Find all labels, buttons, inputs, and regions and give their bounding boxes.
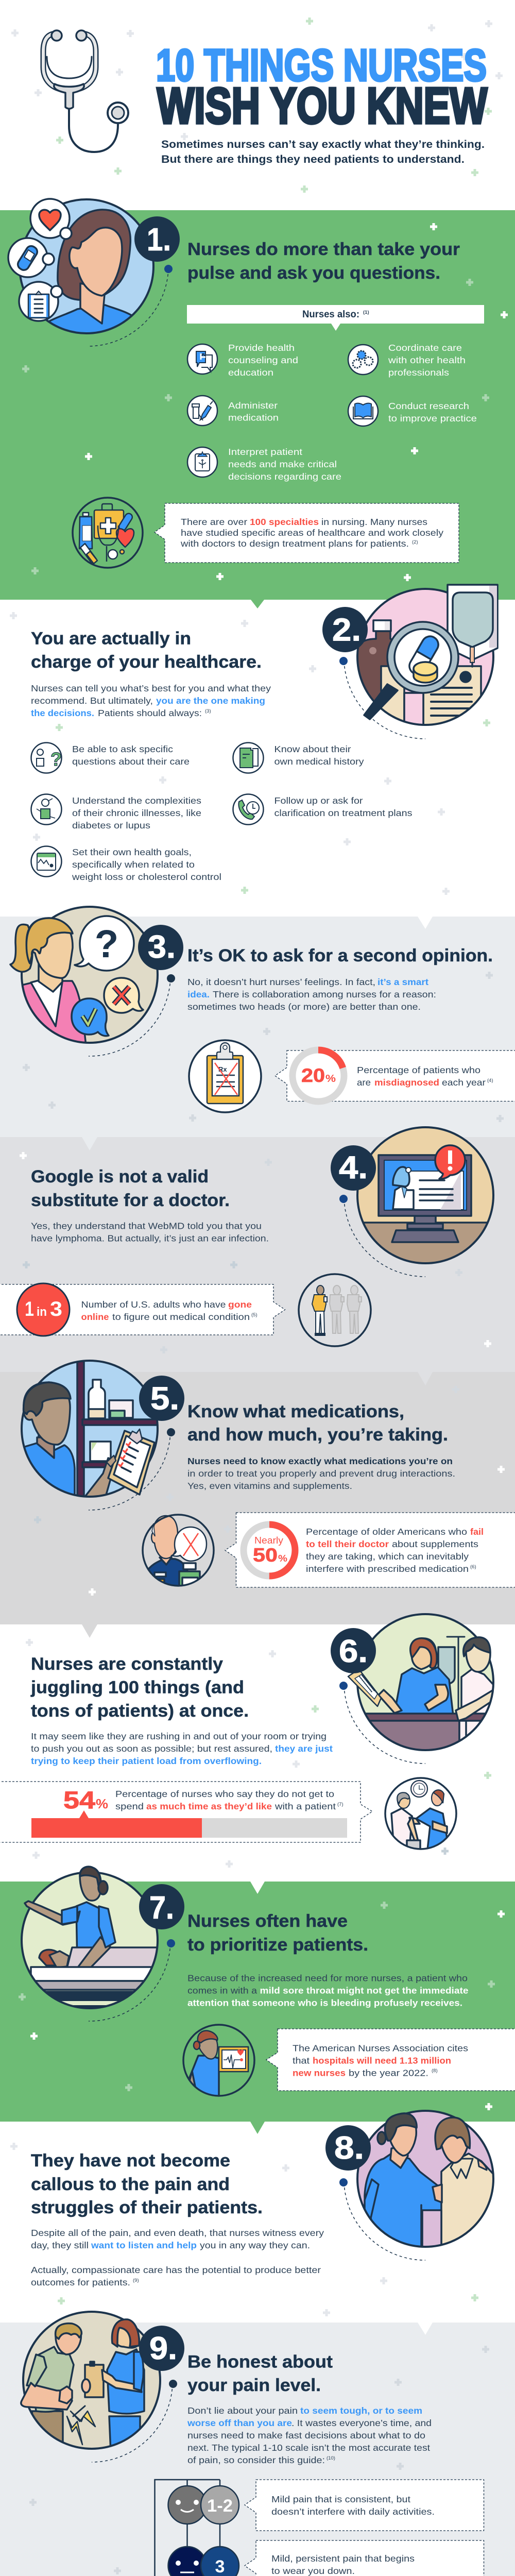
list item: health goals <box>31 846 221 882</box>
stat box: 20% misdiagnosed: Percentage of patients who <box>357 1065 480 1075</box>
number badge 5: 5. <box>150 1381 179 1417</box>
heading: Nurses often have <box>187 1911 348 1931</box>
stat box: 1 in 3: (5) <box>251 1312 258 1318</box>
illustration: patient in pain with nurse <box>21 2312 160 2452</box>
illustration: doctor on monitor <box>355 1127 494 1269</box>
stat box: 1 in 3: online <box>81 1312 109 1322</box>
dashed connector <box>344 2182 425 2260</box>
text block: Nurses can tell you what’s best for you and what they <box>31 683 271 693</box>
text block: you are the one making <box>156 696 265 706</box>
text block: it’s a smart <box>377 977 428 987</box>
number badge 2 <box>322 607 368 652</box>
list item: chronic illness: of their chronic illnesses, like <box>72 808 201 818</box>
level 1-2: 1-2 <box>207 2496 233 2516</box>
heading: callous to the pain and <box>31 2175 230 2194</box>
heading: and how much, you’re taking. <box>187 1425 448 1445</box>
text block: Don’t lie about your pain <box>187 2405 298 2416</box>
stat box: 1.13 million nurses: (8) <box>432 2068 438 2074</box>
stat box: 54% bar chart: % <box>96 1796 108 1811</box>
stat box: 20% misdiagnosed: are <box>357 1077 371 1088</box>
heading <box>187 2352 333 2395</box>
number badge 3: 3. <box>148 929 176 965</box>
stat box: 54% bar chart: spend <box>115 1801 144 1811</box>
heading: Nurses are constantly <box>31 1654 223 1674</box>
stat box: 20% misdiagnosed: misdiagnosed <box>374 1077 439 1088</box>
text block <box>187 977 436 1012</box>
heading: to prioritize patients. <box>187 1935 368 1955</box>
callout: 100 specialties: with doctors to design treatment plans for patients. <box>180 538 409 549</box>
stat box: nearly 50%: about supplements <box>392 1539 478 1549</box>
text block: want to listen and help <box>91 2240 197 2250</box>
subtitle: But there are things they need patients to understand. <box>161 154 465 165</box>
list item: health goals: Set their own health goals, <box>72 847 192 857</box>
list item: counseling <box>187 343 298 378</box>
heading: They have not become <box>31 2151 230 2171</box>
heading: your pain level. <box>187 2376 321 2395</box>
list item: interpret: needs and make critical <box>228 459 337 469</box>
stat box: 20% misdiagnosed: % <box>325 1073 336 1084</box>
heading: Know what medications, <box>187 1402 404 1421</box>
stat box: 20% misdiagnosed: each year <box>442 1077 486 1088</box>
text block: worse off than you are <box>187 2418 292 2428</box>
heading: tons of patients) at once. <box>31 1701 249 1721</box>
heading <box>187 240 460 283</box>
list item: research <box>348 396 477 426</box>
callout: nurses also <box>187 305 484 331</box>
heading: struggles of their patients. <box>31 2198 263 2217</box>
level 1-2: Mild pain that is consistent, but <box>271 2494 410 2504</box>
stat box: 1 in 3: 3 <box>50 1298 62 1320</box>
text block: nurses need to make fast decisions about what to do <box>187 2430 425 2441</box>
text block <box>31 1221 269 1244</box>
text block <box>187 1973 469 2008</box>
chart: pain levels <box>104 2480 484 2576</box>
frame lines <box>154 2480 220 2576</box>
list item: health goals: specifically when related to <box>72 859 195 870</box>
heading <box>31 629 262 672</box>
heading <box>31 2151 263 2217</box>
text block: next. The typical 1-10 scale isn’t the most accurate test <box>187 2443 430 2453</box>
list item: interpret: Interpret patient <box>228 447 302 457</box>
heading: substitute for a doctor. <box>31 1191 230 1210</box>
text block: trying to keep their patient load from overflowing. <box>31 1756 262 1766</box>
callout: 100 specialties: 100 specialties <box>250 517 319 527</box>
number badge 6 <box>331 1628 376 1673</box>
dashed connector <box>344 661 425 739</box>
callout: nurses also: Nurses also: <box>302 309 359 320</box>
number badge 7 <box>139 1884 184 1929</box>
panel: section 6 <box>0 1614 494 1850</box>
list item: coordinate <box>348 343 466 378</box>
text block: recommend. But ultimately, <box>31 696 153 706</box>
icon: nurse with elderly patient <box>385 1778 456 1850</box>
list item: ask questions: ? <box>50 749 62 770</box>
subtitle: Sometimes nurses can’t say exactly what they’re thinking. <box>161 139 485 150</box>
text block: mild sore throat might not get the immediate <box>260 1986 469 1996</box>
list item: medical history: Know about their <box>274 744 351 754</box>
dot <box>164 265 173 273</box>
title <box>156 40 487 134</box>
list item: health goals: weight loss or cholesterol control <box>72 872 221 882</box>
stat box: 20% misdiagnosed: (4) <box>487 1078 493 1083</box>
number badge 8: 8. <box>334 2130 364 2166</box>
level 3: to wear you down. <box>271 2566 355 2576</box>
list item: medication: Administer <box>228 400 278 411</box>
panel: section 2 <box>31 585 497 882</box>
level 1-2 <box>168 2480 484 2531</box>
dashed connector <box>344 1199 425 1277</box>
text block: Yes, they understand that WebMD told you that you <box>31 1221 262 1231</box>
list item: ask questions: Be able to ask specific <box>72 744 173 754</box>
illustration: nurse with bubbles <box>8 199 153 340</box>
stat box: 1.13 million nurses: by the year 2022. <box>349 2068 428 2078</box>
number badge 7: 7. <box>149 1890 174 1926</box>
list item: coordinate: professionals <box>388 367 449 378</box>
stat box: nearly 50%: Nearly <box>254 1535 283 1546</box>
dot <box>167 1428 175 1436</box>
heading: juggling 100 things (and <box>30 1677 244 1697</box>
text block: Patients should always: <box>98 708 202 718</box>
stat box: 54% bar chart: Percentage of nurses who say they do not get to <box>115 1789 334 1799</box>
panel: section 4 <box>0 1127 494 1346</box>
heading: It’s OK to ask for a second opinion. <box>187 946 493 965</box>
dot <box>339 1195 348 1203</box>
illustration: magnifier with pill <box>355 585 497 732</box>
list item: ask questions: questions about their care <box>72 756 190 767</box>
level 3: 3 <box>215 2557 225 2576</box>
number badge 2: 2. <box>332 612 361 648</box>
level 3: Mild, persistent pain that begins <box>271 2553 415 2564</box>
text block: (3) <box>205 708 211 714</box>
text block: Actually, compassionate care has the potential to produce better <box>31 2265 321 2275</box>
dot <box>339 657 348 665</box>
list item: chronic illness: Understand the complexities <box>72 795 201 806</box>
list item: follow up: clarification on treatment plans <box>274 808 413 818</box>
dashed connector <box>88 269 168 346</box>
number badge 3 <box>138 925 183 970</box>
heading: charge of your healthcare. <box>31 652 262 672</box>
stat box: 1.13 million nurses <box>266 2029 515 2091</box>
list item: counseling: counseling and <box>228 355 298 365</box>
heading <box>30 1654 249 1721</box>
heading: pulse and ask you questions. <box>187 263 440 283</box>
list item: follow up <box>233 794 413 824</box>
text block: in order to treat you properly and prevent drug interactions. <box>187 1468 455 1479</box>
icon: prescription clipboard: Rx <box>218 1065 227 1073</box>
list item: follow up: Follow up or ask for <box>274 795 363 806</box>
callout: 100 specialties <box>154 503 459 563</box>
stat box: 1 in 3: 1 <box>25 1298 34 1320</box>
text block: idea. <box>187 989 210 999</box>
dashed connector <box>89 1943 170 2021</box>
text block: outcomes for patients. <box>31 2277 130 2287</box>
level 1-2: doesn’t interfere with daily activities. <box>271 2506 435 2517</box>
text block: Because of the increased need for more nurses, a patient who <box>187 1973 468 1984</box>
heading: Be honest about <box>187 2352 333 2372</box>
illustration: woman with speech bubbles: ? <box>95 922 118 966</box>
stat box: nearly 50%: fail <box>470 1527 484 1537</box>
stat box: 20% misdiagnosed <box>275 1050 515 1101</box>
illustration: nurse juggling at counter <box>348 1614 494 1757</box>
level 3 <box>168 2540 484 2576</box>
stat box: nearly 50%: Percentage of older Americans who <box>306 1527 467 1537</box>
dot <box>167 974 175 982</box>
stat box: 20% misdiagnosed: 20 <box>301 1065 325 1086</box>
stat box: 54% bar chart: 54 <box>63 1786 95 1814</box>
number badge 4 <box>331 1145 376 1191</box>
list item: medical history <box>233 743 364 773</box>
dashed connector <box>89 1432 170 1510</box>
text block: (9) <box>133 2278 139 2283</box>
text block: (10) <box>327 2455 335 2461</box>
number badge 1: 1. <box>147 222 171 258</box>
text block: It may seem like they are rushing in and out of your room or trying <box>31 1731 327 1741</box>
stat box: 54% bar chart: as much time as they’d like <box>146 1801 272 1811</box>
text block <box>31 683 271 718</box>
callout: 100 specialties: have studied specific areas of healthcare and work closely <box>181 528 443 538</box>
dashed connector <box>92 2384 173 2462</box>
stat box: nearly 50%: (6) <box>470 1564 476 1570</box>
stat box: 54% bar chart <box>0 1782 372 1842</box>
number badge 8 <box>325 2125 371 2171</box>
heading <box>187 1402 448 1445</box>
illustration: nurse comforting patient <box>357 2111 493 2254</box>
stat box: nearly 50% <box>225 1513 515 1587</box>
list item: medical history: own medical history <box>274 756 364 767</box>
text block: . It wastes everyone’s time, and <box>291 2418 432 2428</box>
panel: section 7 <box>22 1867 515 2099</box>
heading: Nurses do more than take your <box>187 240 460 259</box>
text block <box>31 1731 333 1766</box>
number badge 5 <box>139 1376 184 1421</box>
text block: to push you out as soon as possible; but rest assured, <box>31 1743 272 1754</box>
dot <box>169 2380 177 2388</box>
panel: section 1 <box>8 199 484 568</box>
illustration: man with medicine shelf <box>21 1360 159 1498</box>
panel: section 5 <box>15 1355 515 1595</box>
callout: 100 specialties: (2) <box>412 539 418 545</box>
dashed connector <box>89 978 170 1056</box>
icon: older man refusing <box>143 1515 214 1595</box>
stat box: 1 in 3: Number of U.S. adults who have <box>81 1299 226 1310</box>
stat box: nearly 50%: to tell their doctor <box>306 1539 389 1549</box>
text block: Yes, even vitamins and supplements. <box>187 1481 352 1491</box>
subtitle <box>161 139 485 165</box>
icon: prescription clipboard <box>189 1040 261 1112</box>
text block: of pain, so consider this guide: <box>187 2455 325 2465</box>
list item: coordinate: Coordinate care <box>388 343 462 353</box>
stat box: 54% bar chart: (7) <box>337 1802 344 1807</box>
text block <box>31 2228 324 2287</box>
number badge 1 <box>134 216 180 262</box>
dot <box>167 1939 175 1947</box>
stat box: 54% bar chart: with a patient <box>274 1801 336 1811</box>
panel: section 9 <box>21 2312 484 2576</box>
icon: nurse with heart monitor <box>183 2025 254 2099</box>
list item: counseling: education <box>228 367 273 378</box>
list item: chronic illness <box>31 794 201 831</box>
text block: There is collaboration among nurses for a reason: <box>213 989 436 999</box>
stat box: 1.13 million nurses: new nurses <box>293 2068 346 2078</box>
stat box: 1.13 million nurses: The American Nurses Association cites <box>293 2043 468 2054</box>
text block: attention that someone who is bleeding profusely receives. <box>187 1998 462 2008</box>
stat box: 1 in 3: in <box>37 1305 47 1319</box>
text block: you in any way they can. <box>200 2240 310 2250</box>
illustration: woman with speech bubbles <box>10 907 158 1051</box>
list item: medication <box>187 396 279 426</box>
list item: coordinate: with other health <box>388 355 466 365</box>
stat box: nearly 50%: they are taking, which can inevitably <box>306 1551 469 1562</box>
dashed connector <box>344 1686 425 1764</box>
stat box: nearly 50%: interfere with prescribed medication <box>306 1564 469 1574</box>
callout: nurses also: (1) <box>363 310 369 315</box>
text block: they are just <box>275 1743 333 1754</box>
text block <box>187 1456 455 1491</box>
heading <box>187 1911 368 1955</box>
text block: have lymphoma. But actually, it’s just an ear infection. <box>31 1233 269 1244</box>
dot <box>339 1682 348 1690</box>
text block: the decisions. <box>31 708 94 718</box>
number badge 9: 9. <box>149 2331 177 2366</box>
list item: interpret: decisions regarding care <box>228 471 341 482</box>
stat box: 1.13 million nurses: hospitals will need 1.13 million <box>313 2056 451 2066</box>
panel: section 8 <box>31 2111 493 2287</box>
number badge 6: 6. <box>339 1634 368 1669</box>
list item: interpret <box>187 447 341 482</box>
text block: Nurses need to know exactly what medications you’re on <box>187 1456 453 1466</box>
panel: section 3 <box>10 907 515 1112</box>
number badge 9 <box>139 2326 184 2371</box>
illustration: nurse pointing at patient in bed <box>22 1867 160 2009</box>
stat box: 1.13 million nurses: that <box>293 2056 310 2066</box>
list item: medication: medication <box>228 412 279 422</box>
heading: You are actually in <box>31 629 191 648</box>
stat box: 1 in 3: to figure out medical condition <box>112 1312 250 1322</box>
heading: Google is not a valid <box>31 1167 209 1187</box>
stat box: 1 in 3: gone <box>228 1299 252 1310</box>
list item: ask questions <box>31 743 190 773</box>
list item: research: Conduct research <box>388 401 469 411</box>
text block: to seem tough, or to seem <box>300 2405 422 2416</box>
icon: people on phones <box>299 1274 371 1346</box>
number badge 4: 4. <box>339 1150 368 1185</box>
text block: Despite all of the pain, and even death, that nurses witness every <box>31 2228 324 2238</box>
text block: day, they still <box>31 2240 89 2250</box>
heading <box>31 1167 230 1210</box>
callout: 100 specialties: in nursing. Many nurses <box>321 517 427 527</box>
illustration: medical kit <box>73 498 143 568</box>
icon: stethoscope <box>43 30 128 152</box>
list item: research: to improve practice <box>388 413 477 423</box>
text block <box>187 2405 432 2465</box>
dot <box>339 2178 348 2187</box>
text block: sometimes two heads (or more) are better than one. <box>187 1002 421 1012</box>
stat box: nearly 50%: % <box>278 1553 287 1564</box>
list item: chronic illness: diabetes or lupus <box>72 820 150 831</box>
list item: counseling: Provide health <box>228 343 295 353</box>
callout: 100 specialties: There are over <box>181 517 247 527</box>
text block: comes in with a <box>187 1986 257 1996</box>
stat box: nearly 50%: 50 <box>253 1545 278 1566</box>
text block: No, it doesn’t hurt nurses’ feelings. In fact, <box>187 977 375 987</box>
stat box: 1 in 3 <box>0 1283 285 1336</box>
